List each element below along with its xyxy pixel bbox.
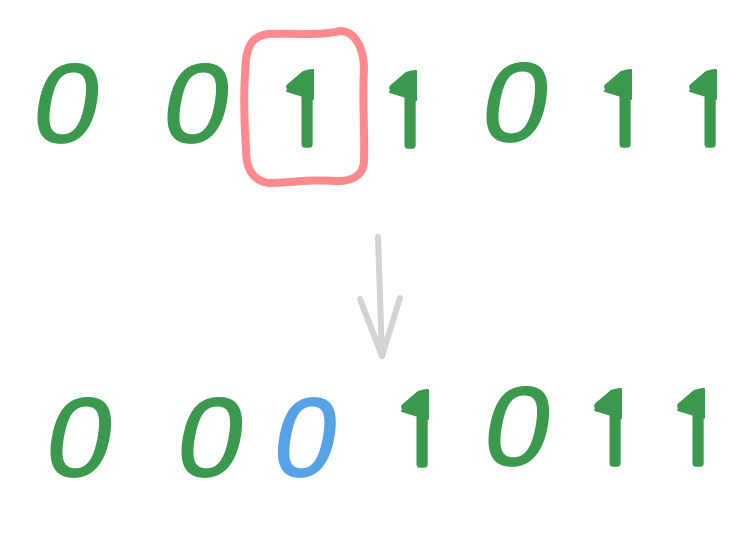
top row of bits: 1: [678, 62, 736, 159]
top row of bits: [24, 39, 736, 166]
top row of bits: 1: [275, 62, 333, 159]
bottom row of bits: 0: [168, 374, 256, 500]
highlight box around third bit: [244, 31, 364, 183]
top row of bits: 0: [154, 40, 242, 166]
top row of bits: 1: [378, 63, 436, 160]
top row of bits: 0: [473, 39, 561, 165]
changed bit in blue: 0: [265, 375, 349, 500]
arrow pointing down: [360, 237, 400, 356]
bottom row of bits: 1: [583, 381, 641, 478]
bottom row of bits: [37, 363, 724, 500]
top row of bits: 1: [593, 62, 651, 159]
bottom row of bits: 0: [37, 374, 125, 500]
bottom row of bits: 1: [390, 382, 448, 479]
top row of bits: 0: [24, 40, 112, 166]
bottom row of bits: 0: [475, 363, 563, 489]
bottom row of bits: 1: [666, 381, 724, 478]
